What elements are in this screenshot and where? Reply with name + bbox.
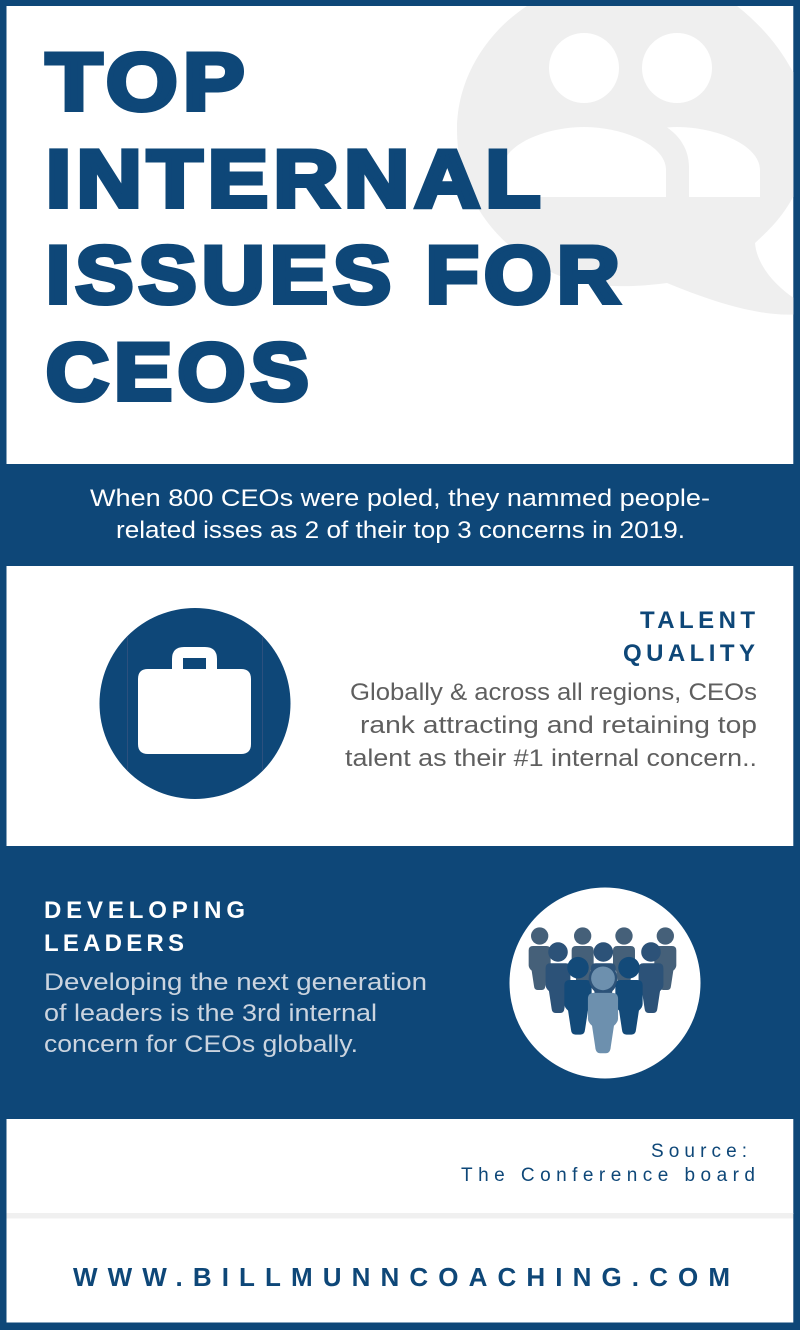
heading: talent quality: TALENT — [640, 607, 755, 634]
text: talent quality description — [345, 679, 757, 772]
heading: talent quality — [623, 607, 755, 667]
heading: developing leaders: LEADERS — [44, 930, 184, 957]
text: developing leaders description: Developing the next generation — [44, 969, 427, 996]
panel: source: The Conference board — [461, 1165, 755, 1186]
icon: speech bubble with people — [457, 6, 800, 315]
website url: WWW.BILLMUNNCOACHING.COM — [73, 1262, 730, 1292]
title: ISSUES FOR — [46, 230, 625, 320]
title: CEOS — [46, 328, 314, 418]
icon: group of people — [510, 888, 700, 1078]
text: developing leaders description: concern for CEOs globally. — [44, 1031, 358, 1058]
text: developing leaders description: of leaders is the 3rd internal — [44, 1000, 377, 1027]
panel: website footer — [6, 1218, 793, 1322]
heading: talent quality: QUALITY — [623, 640, 755, 667]
intro text band: When 800 CEOs were poled, they nammed people- — [90, 485, 710, 512]
panel: source: Source: — [651, 1141, 747, 1162]
panel: title header — [6, 6, 800, 464]
title: INTERNAL — [46, 134, 546, 224]
intro text band: related isses as 2 of their top 3 concerns in 2019. — [116, 517, 685, 544]
title: TOP — [46, 38, 250, 128]
text: talent quality description: talent as their #1 internal concern.. — [345, 745, 757, 772]
heading: developing leaders — [44, 897, 245, 957]
title — [46, 38, 625, 418]
text: developing leaders description — [44, 969, 427, 1058]
panel: talent quality — [6, 566, 793, 846]
icon: briefcase — [100, 608, 290, 799]
panel: source — [6, 1119, 793, 1214]
intro text band — [0, 464, 800, 566]
panel: developing leaders — [0, 846, 800, 1119]
heading: developing leaders: DEVELOPING — [44, 897, 245, 924]
text: talent quality description: Globally & across all regions, CEOs — [350, 679, 757, 706]
text: talent quality description: rank attracting and retaining top — [360, 712, 757, 739]
